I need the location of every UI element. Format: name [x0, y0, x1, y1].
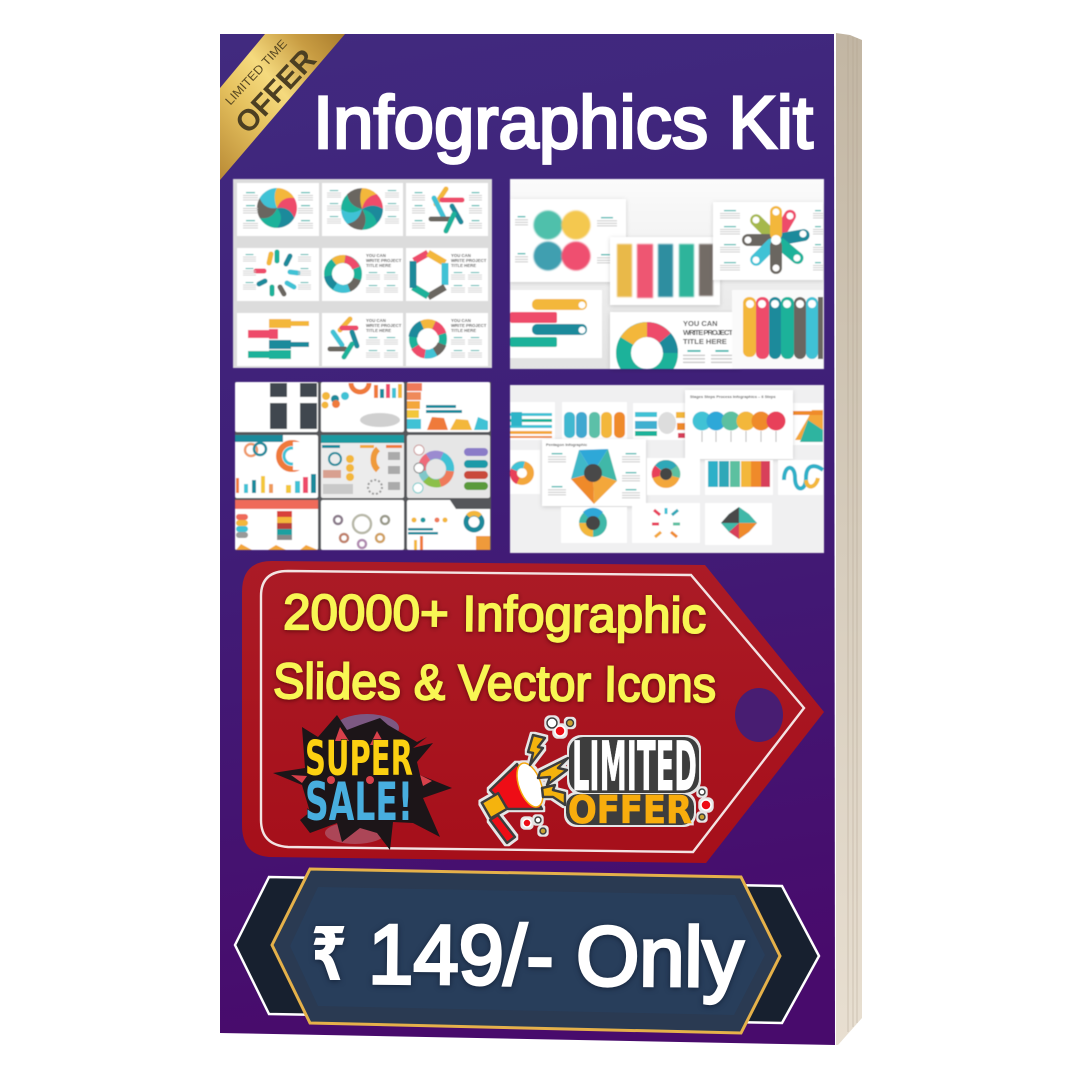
- hexagon slide 6: [413, 253, 445, 297]
- dark device tiles: [270, 383, 317, 429]
- six vertical bars card: [732, 290, 823, 369]
- slide captions: TITLE HERE: [451, 263, 476, 268]
- megaphone icon: [482, 735, 568, 843]
- multi-colour dots and columns: [322, 383, 402, 427]
- slide captions: YOU CAN: [366, 318, 386, 323]
- octagon star card: [705, 503, 772, 545]
- slide captions: WRITE PROJECT: [451, 323, 487, 328]
- tag inner outline: [261, 571, 804, 852]
- cycle donut tile: [413, 445, 488, 493]
- title: Infographics Kit: [313, 81, 813, 164]
- star ring card: [561, 507, 627, 543]
- brain card: [633, 403, 686, 440]
- arrow tabs card: [705, 460, 773, 495]
- slide captions: WRITE PROJECT: [366, 323, 402, 328]
- slide captions: YOU CAN: [451, 318, 471, 323]
- slide captions: TITLE HERE: [366, 328, 391, 333]
- brush circles card: [510, 199, 626, 282]
- ring card: TITLE HERE: [683, 337, 727, 346]
- panel: bottom-left dark dashboard collage: [235, 382, 491, 550]
- donut slide 5: [328, 259, 358, 289]
- pentagon ring small card: [510, 450, 540, 494]
- panel: top-right slide collage: [510, 179, 824, 376]
- red header stacks tile: [235, 500, 318, 550]
- slide captions: TITLE HERE: [366, 263, 391, 268]
- pentagon star card: Pentagon Infographic: [546, 442, 588, 447]
- decorative dots: [523, 718, 711, 834]
- list card: [510, 402, 555, 440]
- panel: top-left slide collage: [233, 179, 492, 368]
- tag heading: [273, 584, 716, 713]
- badge: limited offer: [482, 718, 711, 843]
- gear ring slide 9: [413, 324, 443, 354]
- outer hexagon: [235, 877, 819, 1023]
- slide captions: TITLE HERE: [451, 328, 476, 333]
- ribbon: limited time offer: [220, 34, 345, 180]
- wave card: [778, 460, 823, 495]
- ring card: [647, 458, 700, 495]
- badge: super sale: [273, 714, 452, 850]
- tag hole: [735, 688, 783, 742]
- red price tag: [242, 561, 824, 863]
- pyramid card: [793, 403, 823, 445]
- radial nodes tile: [334, 515, 389, 548]
- inner gold hexagon: [272, 869, 780, 1033]
- badge: super sale: SUPER: [305, 731, 413, 787]
- centre dashboard tile: [321, 435, 404, 494]
- strips slide 7: [248, 319, 309, 359]
- book mockup infographic: LIMITED: [572, 728, 697, 807]
- arrows slide 8: [330, 319, 357, 357]
- ring card: WRITE PROJECT: [683, 328, 733, 337]
- ring card: YOU CAN: [683, 319, 718, 328]
- six circles process card: Stages Steps Process Infographics – 6 Steps: [690, 394, 776, 399]
- strips card: [510, 290, 602, 358]
- five pills card: [562, 402, 627, 440]
- pentagon star card: [542, 439, 646, 506]
- header and gauge tile: [235, 435, 316, 493]
- radial arrows card: [632, 503, 700, 543]
- book cover background: [220, 34, 835, 1045]
- dark backing behind LIMITED: [569, 737, 699, 793]
- slide text lines: [243, 190, 482, 357]
- badge: limited offer: OFFER: [568, 788, 692, 832]
- stepped list and waves: [407, 383, 488, 430]
- tag heading: Slides & Vector Icons: [273, 653, 716, 713]
- slide captions: WRITE PROJECT: [366, 258, 402, 263]
- eight petal card: [713, 202, 823, 280]
- panel: bottom-right slide collage: [510, 385, 824, 553]
- six circles process card: [685, 390, 793, 459]
- grey header mix tile: [408, 500, 490, 550]
- ring card: [610, 312, 741, 376]
- ring of arrows slide 4: [256, 252, 298, 294]
- price text: ₹: [311, 913, 347, 996]
- red burst accents: [291, 727, 432, 786]
- arrows slide 3: [431, 189, 462, 231]
- price banner: [235, 869, 819, 1033]
- price text: 149/- Only: [368, 907, 744, 1004]
- ribbon: limited time offer: LIMITED TIME: [222, 37, 290, 108]
- book mockup infographic: [220, 33, 862, 1045]
- tag heading: 20000+ Infographic: [283, 584, 706, 644]
- book spine pages: [836, 33, 862, 1045]
- slide captions: YOU CAN: [366, 253, 386, 258]
- black burst: [273, 715, 452, 850]
- brush bars card: [610, 237, 720, 305]
- pinwheel slide 2: [337, 184, 387, 234]
- pinwheel slide 1: [251, 183, 303, 233]
- ribbon: limited time offer: OFFER: [229, 43, 323, 140]
- slide captions: YOU CAN: [451, 253, 471, 258]
- slide captions: [366, 253, 487, 333]
- dark backing behind OFFER: [566, 794, 694, 825]
- slide captions: WRITE PROJECT: [451, 258, 487, 263]
- badge: super sale: SALE!: [305, 772, 413, 833]
- halftone blue glow: [325, 714, 399, 844]
